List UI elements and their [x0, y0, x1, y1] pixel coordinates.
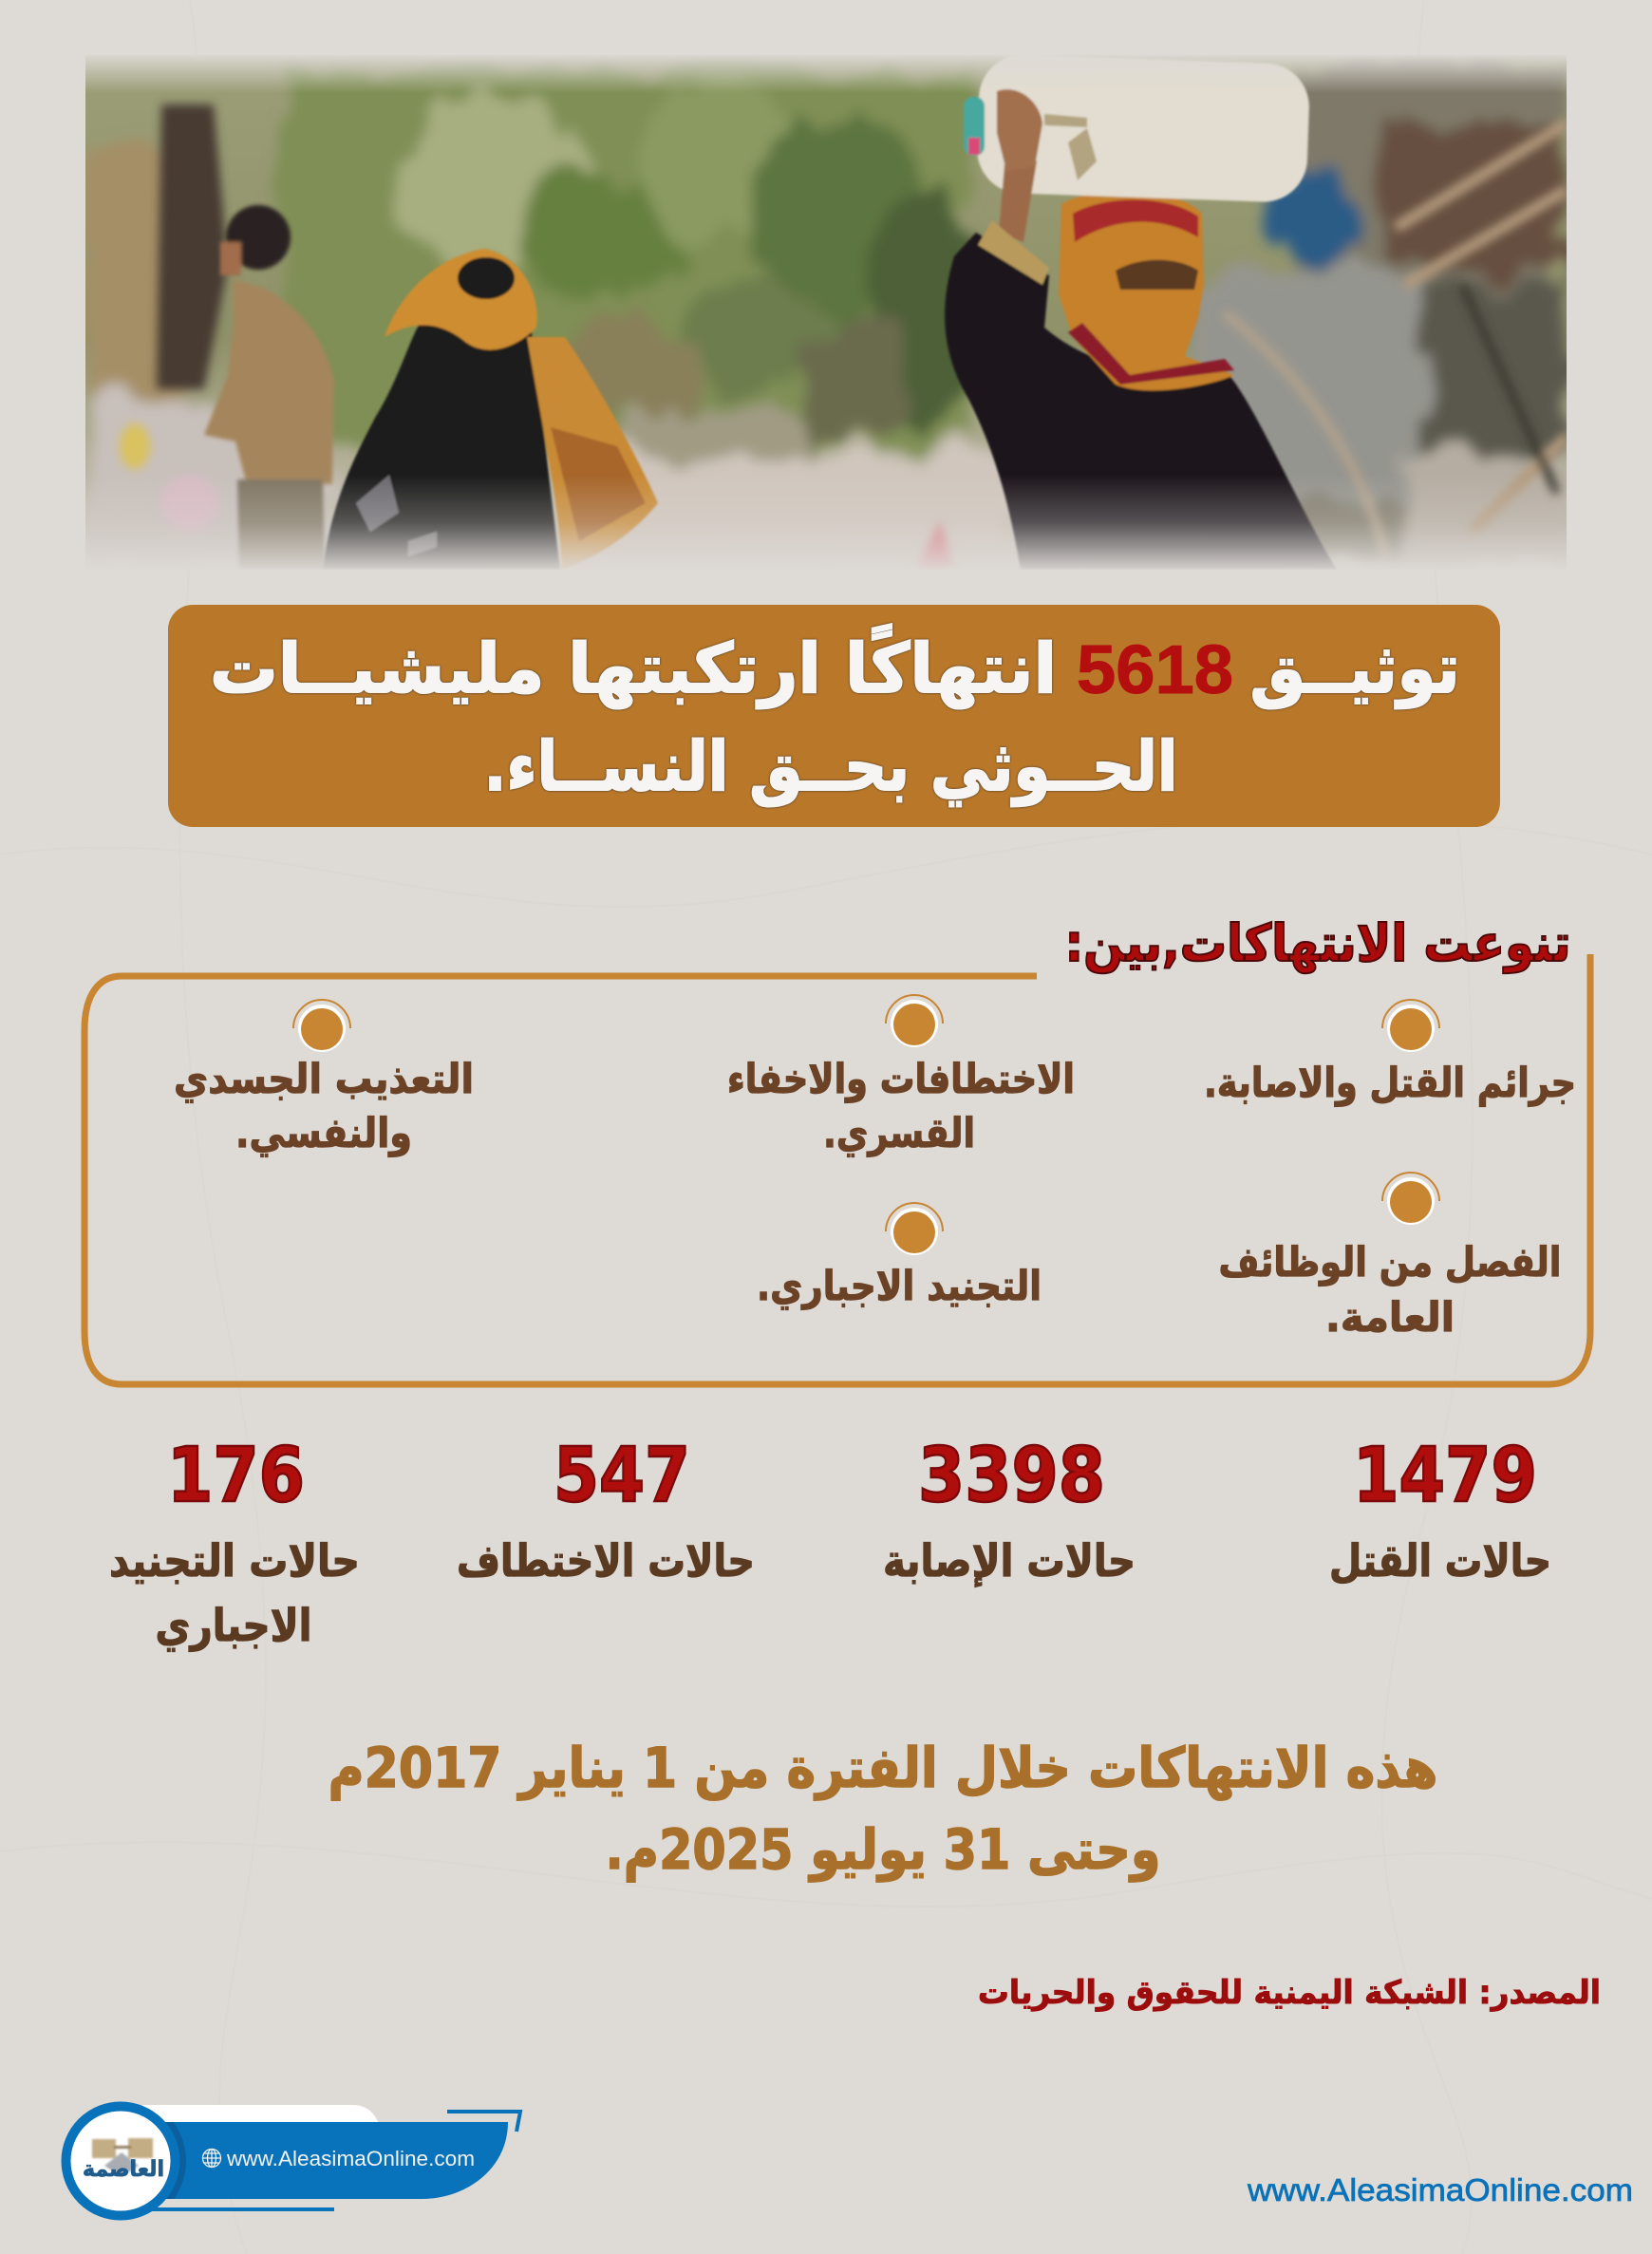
item: abductions and forced disappearance: القسري. — [823, 1110, 975, 1157]
period statement: هذه الانتهاكات خلال الفترة من 1 يناير 2017م — [329, 1736, 1438, 1801]
item: killing and injury: جرائم القتل والاصابة. — [1204, 1060, 1576, 1107]
item: abductions and forced disappearance — [727, 1056, 1075, 1157]
item: forced conscription: التجنيد الاجباري. — [757, 1263, 1042, 1310]
period statement — [329, 1736, 1438, 1883]
stat: forced conscription: 176 — [167, 1432, 305, 1519]
stat: killings: حالات القتل — [1329, 1535, 1551, 1587]
footer logo banner — [61, 2102, 522, 2220]
bullet 5 — [886, 1203, 943, 1255]
period statement: وحتى 31 يوليو 2025م. — [606, 1817, 1160, 1883]
item: dismissal from public jobs — [1219, 1239, 1561, 1342]
source line: المصدر: الشبكة اليمنية للحقوق والحريات — [978, 1974, 1601, 2012]
stat: forced conscription: الاجباري — [156, 1600, 311, 1652]
stat: abductions: حالات الاختطاف — [457, 1535, 755, 1587]
title banner — [168, 605, 1500, 827]
bullet 3 — [293, 1000, 350, 1052]
bullet 2 — [886, 995, 943, 1047]
stat: killings: 1479 — [1353, 1432, 1537, 1519]
left woman in black with orange scarf — [323, 249, 658, 570]
bullet 4 — [1382, 1173, 1439, 1225]
title banner: 5618 — [1077, 632, 1233, 708]
item: dismissal from public jobs: العامة. — [1325, 1294, 1455, 1342]
stat: injuries — [883, 1432, 1136, 1587]
title banner: توثيــق — [1249, 629, 1460, 709]
panel: types of violations — [84, 913, 1590, 1384]
bullet 1 — [1382, 1000, 1439, 1052]
stat: injuries: حالات الإصابة — [883, 1535, 1136, 1587]
item: dismissal from public jobs: الفصل من الوظائف — [1219, 1239, 1561, 1287]
item: physical and psychological torture: التعذيب الجسدي — [174, 1056, 474, 1103]
stat: injuries: 3398 — [918, 1432, 1105, 1519]
photo: women carrying water — [85, 53, 1567, 570]
logo mark: العاصمة — [83, 2157, 164, 2182]
title banner: انتهاكًا ارتكبتها مليشيــات — [210, 624, 1057, 709]
stat: abductions: 547 — [554, 1432, 690, 1519]
banner url: www.AleasimaOnline.com — [226, 2147, 475, 2170]
logo mark — [83, 2138, 164, 2182]
stat: forced conscription — [109, 1432, 360, 1652]
stat: abductions — [457, 1432, 755, 1587]
item: abductions and forced disappearance: الاختطافات والاخفاء — [727, 1056, 1075, 1103]
panel heading: تنوعت الانتهاكات,بين: — [1065, 913, 1570, 973]
website url: www.AleasimaOnline.com — [1247, 2172, 1633, 2207]
stat: forced conscription: حالات التجنيد — [109, 1535, 360, 1587]
title banner: الحــوثي بحــق النســاء. — [484, 726, 1177, 807]
right woman in black with red-orange scarf and jug — [945, 53, 1337, 570]
stat: killings — [1329, 1432, 1551, 1587]
icon: globe — [203, 2150, 220, 2167]
item: physical and psychological torture: والنفسي. — [235, 1110, 412, 1157]
item: physical and psychological torture — [174, 1056, 474, 1157]
child figure — [204, 205, 334, 570]
